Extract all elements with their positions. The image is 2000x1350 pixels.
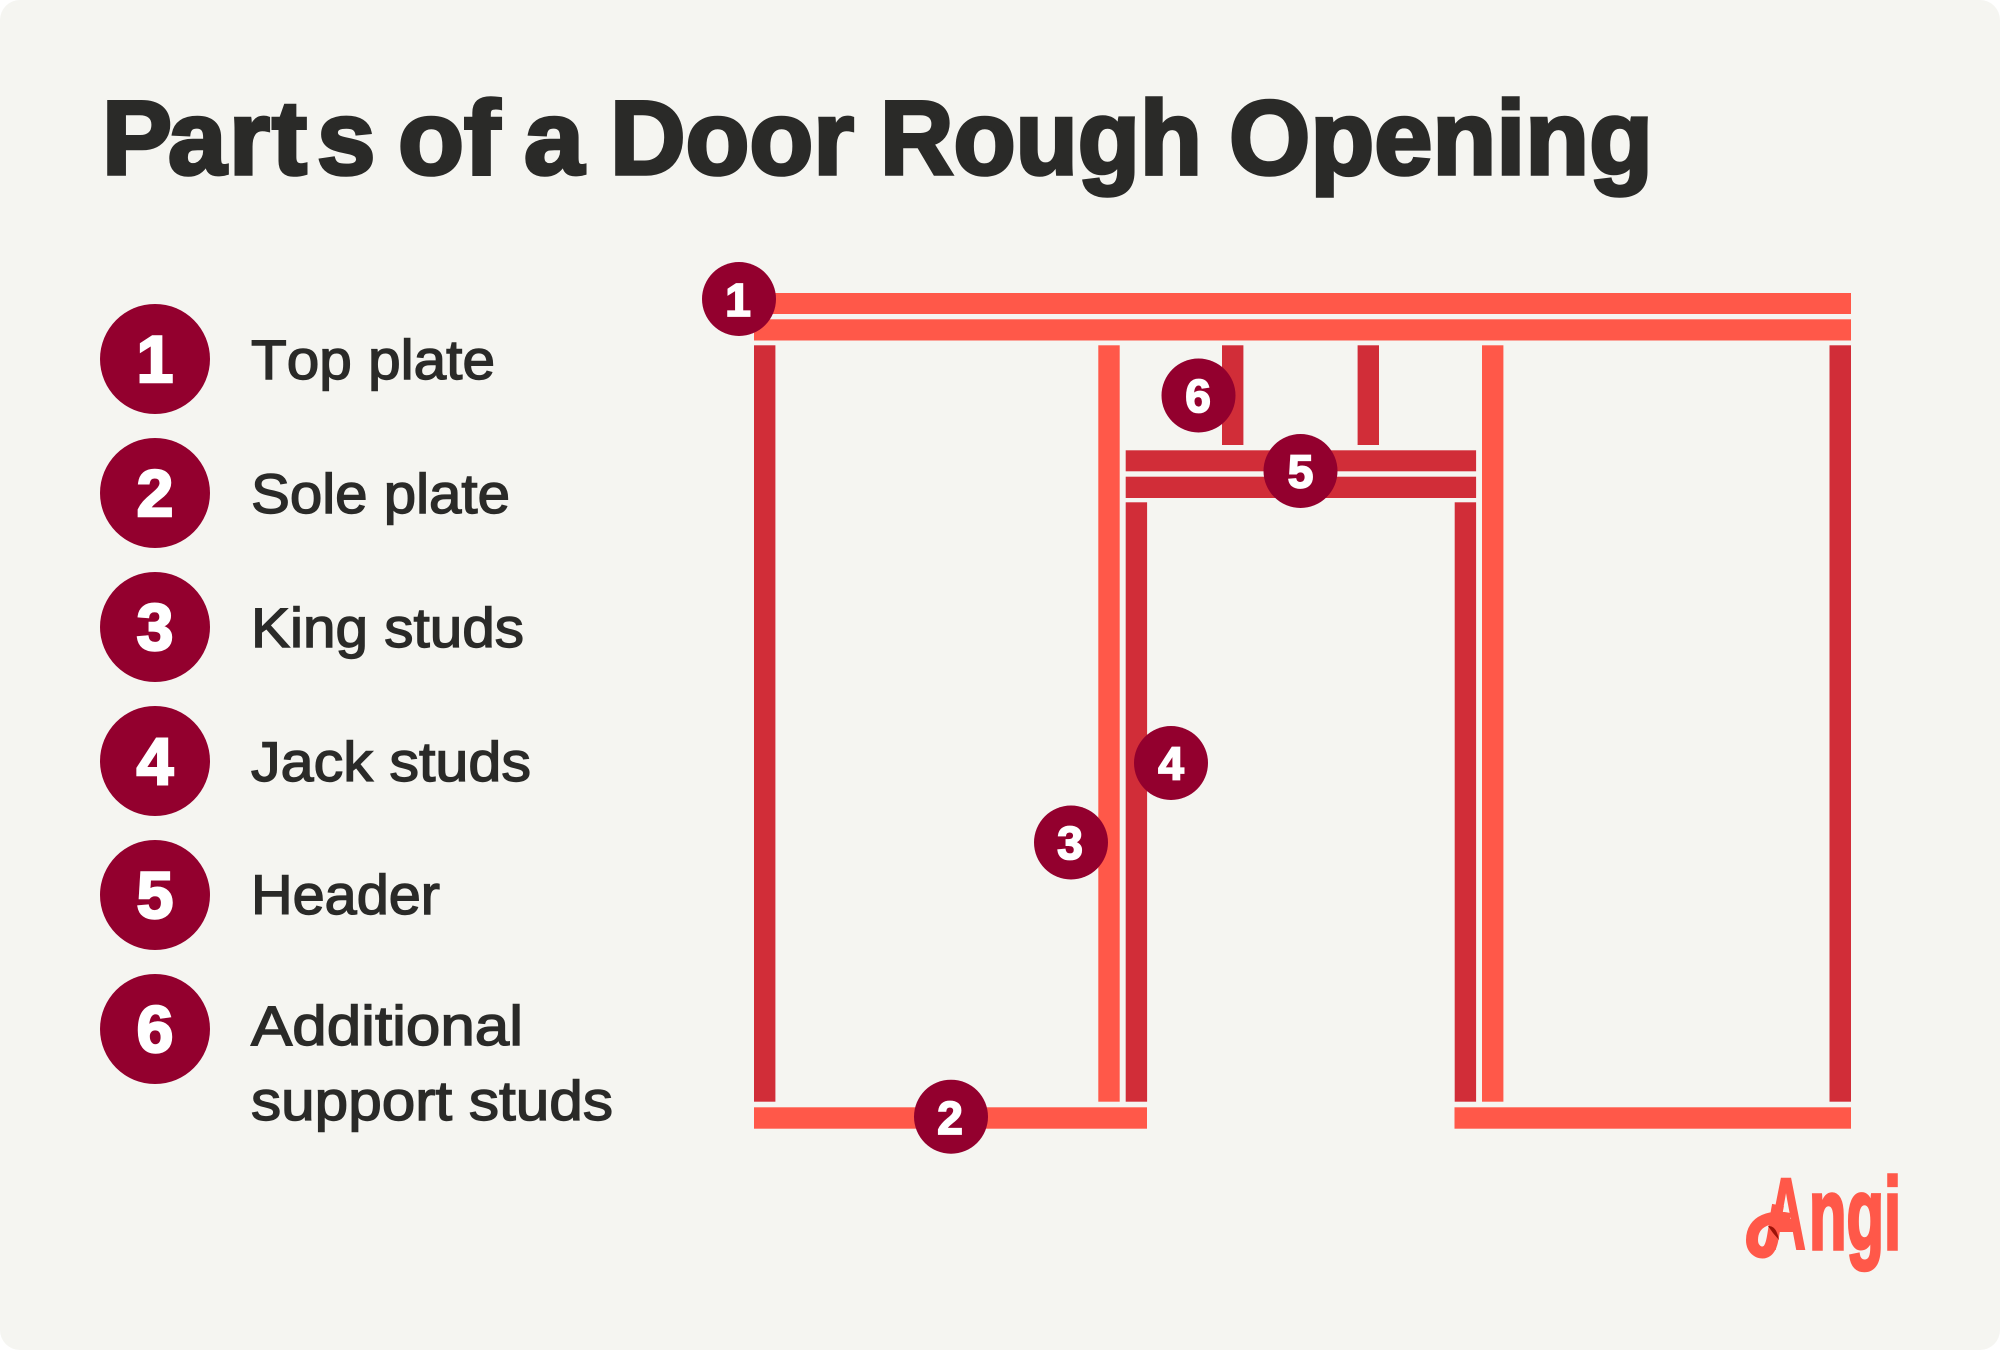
title: Rough	[880, 80, 1202, 197]
marker 2: 2	[937, 1092, 963, 1144]
legend item 6: additional support studs	[100, 974, 613, 1132]
legend item 6: additional support studs: 6	[137, 992, 173, 1066]
marker 2	[914, 1080, 988, 1154]
legend item 3: king studs: 3	[137, 590, 173, 664]
outer wall studs	[754, 345, 1851, 1102]
title: Opening	[1229, 80, 1653, 197]
title: Parts	[102, 80, 375, 197]
legend item 1: top plate: 1	[137, 322, 173, 396]
marker 4	[1134, 726, 1208, 800]
marker 3	[1034, 806, 1108, 880]
marker 5: 5	[1288, 446, 1313, 498]
marker 6: 6	[1185, 370, 1211, 422]
door framing diagram	[702, 262, 1851, 1154]
marker 6	[1162, 358, 1236, 432]
legend item 1: top plate: Top plate	[251, 328, 495, 391]
legend item 2: sole plate: 2	[137, 456, 173, 530]
legend item 2: sole plate: Sole plate	[251, 462, 510, 525]
legend item 5: header	[100, 840, 440, 950]
marker 1: 1	[725, 274, 751, 326]
legend	[100, 304, 613, 1132]
title: a	[524, 80, 586, 197]
title	[102, 80, 1653, 197]
Angi logo: ngi	[1809, 1157, 1901, 1271]
legend item 3: king studs	[100, 572, 524, 682]
legend item 4: jack studs: 4	[137, 724, 174, 798]
marker 3: 3	[1057, 817, 1083, 869]
legend item 5: header: 5	[137, 858, 173, 932]
legend item 5: header: Header	[251, 863, 440, 926]
legend item 2: sole plate	[100, 438, 510, 548]
jack studs	[1126, 502, 1476, 1102]
legend item 4: jack studs: Jack studs	[251, 730, 531, 793]
legend item 3: king studs: King studs	[251, 596, 524, 659]
marker 1	[702, 262, 776, 336]
legend item 1: top plate	[100, 304, 495, 414]
additional support studs	[1222, 345, 1379, 445]
king studs	[1098, 345, 1503, 1102]
Angi logo	[1752, 1157, 1901, 1271]
Angi logo: A	[1766, 1157, 1806, 1271]
marker 4: 4	[1158, 738, 1184, 790]
title: Door	[610, 80, 854, 197]
legend item 6: additional support studs: support studs	[251, 1069, 613, 1132]
legend item 6: additional support studs: Additional	[251, 994, 523, 1057]
header	[1126, 450, 1476, 498]
sole plate	[754, 1107, 1851, 1129]
title: of	[398, 80, 501, 197]
legend item 4: jack studs	[100, 706, 531, 816]
marker 5	[1264, 434, 1338, 508]
top plate	[754, 293, 1851, 340]
